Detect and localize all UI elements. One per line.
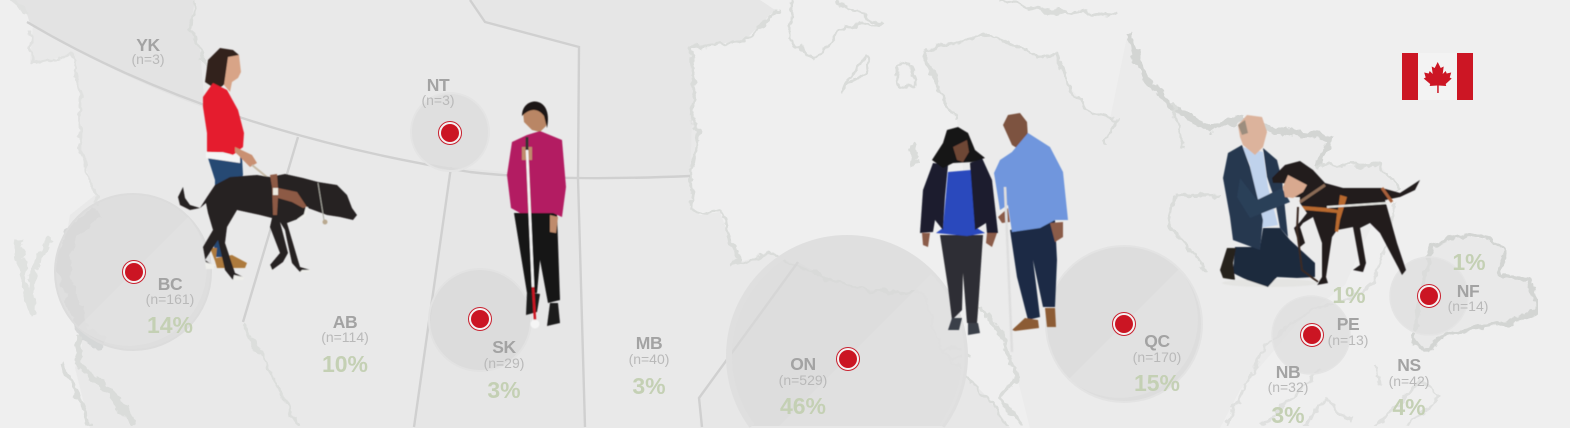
head [1238,115,1267,155]
label: BC: 14% [147,312,193,338]
label: SK [484,337,524,403]
label: NS: NS [1397,355,1421,375]
label: SK: (n=29) [484,355,524,371]
label: SK: SK [492,337,517,357]
label: NT [421,75,455,108]
label: QC: QC [1144,331,1170,351]
label: SK: 3% [487,377,521,403]
arm [1237,178,1290,218]
floor shadow [1222,279,1318,287]
label: PE: 1% [1332,282,1366,308]
marker: BC [122,260,146,284]
white shirt hem [206,152,240,163]
hair [205,48,239,90]
pink shirt [507,131,566,217]
label: MB [629,333,669,399]
icon: Canadian flag [1402,53,1473,100]
marker: ON [836,348,860,370]
shirt [1242,147,1278,228]
label: ON: (n=529) [779,372,827,388]
woman blue top [936,170,985,236]
leash [252,165,273,182]
label: YK [131,35,165,67]
label: PE: PE [1337,314,1359,334]
hands [522,147,558,233]
man head [1003,113,1028,150]
white cane [1005,187,1012,352]
woman hands [922,233,997,247]
woman face [953,140,969,162]
face [224,55,241,92]
trousers [1233,228,1315,287]
label: AB: 10% [322,351,368,377]
black dog [178,174,357,280]
woman trousers [940,235,983,323]
label: BC [146,274,194,338]
man trousers [1010,220,1057,320]
woman jacket [920,158,998,233]
hand [235,147,257,167]
label: NT: (n=3) [421,92,455,108]
harness [1302,195,1347,232]
label: MB: (n=40) [629,351,669,367]
label: ON: 46% [780,393,826,419]
red jacket [203,83,244,155]
circle: NT [411,93,489,171]
marker: NF [1418,284,1440,308]
marker: SK [468,308,492,330]
label: ON [779,354,827,419]
region: Saskatchewan [414,167,585,428]
paws [205,262,311,280]
label: NB: NB [1276,362,1300,382]
label: NS [1389,355,1429,420]
circle: NF [1390,257,1468,335]
provincial borders [27,0,798,427]
label: NF: 1% [1452,249,1486,275]
black dog [1272,161,1420,285]
man shoes [1012,308,1056,331]
label: PE [1328,282,1368,348]
circle: PE [1272,296,1350,374]
label: BC: BC [158,274,183,294]
label: BC: (n=161) [146,291,194,307]
man shirt [994,133,1068,232]
marker: NT [438,122,462,144]
white cane [527,150,533,287]
label: MB: MB [636,333,662,353]
label: NT: NT [427,75,450,95]
woman shoes [948,318,980,335]
label: AB [321,312,369,377]
circle: SK [429,269,531,371]
label: QC: 15% [1134,370,1180,396]
man hands [998,208,1063,242]
black trousers [514,213,560,303]
label: AB: AB [333,312,357,332]
label: NB: 3% [1271,402,1305,428]
landmass: west and north [10,0,1010,428]
label: NS: (n=42) [1389,373,1429,389]
boots [210,248,247,268]
jacket [1223,145,1288,250]
circle: BC [55,194,211,350]
label: NF: (n=14) [1448,298,1488,314]
hand on dog [1283,175,1307,198]
woman hair [932,127,985,168]
circle: QC [1046,246,1202,402]
photo: man kneeling with guide dog [1220,115,1420,287]
photo: woman walking with guide dog [178,48,357,280]
label: QC [1133,331,1181,396]
label: PE: (n=13) [1328,332,1368,348]
label: NB: (n=32) [1268,379,1308,395]
photo: couple walking [920,113,1068,352]
label: NF: NF [1457,281,1480,301]
marker: PE [1300,324,1324,346]
circle: ON [729,238,965,426]
label: NF [1448,249,1488,314]
harness [270,174,307,215]
head [523,107,546,132]
label: AB: (n=114) [321,329,369,345]
label: ON: ON [790,354,816,374]
label: QC: (n=170) [1133,349,1181,365]
jeans [208,157,243,257]
label: NS: 4% [1392,394,1426,420]
label: NB [1268,362,1308,428]
marker: QC [1112,312,1136,336]
region: Nunavut [470,0,775,178]
photo: woman with white cane [507,102,566,328]
shoes [526,292,560,326]
landmass: Newfoundland [1413,235,1538,352]
shoe [1220,248,1236,280]
region: Ontario north [698,262,1010,428]
label: MB: 3% [632,373,666,399]
landmass: Quebec and Labrador [923,32,1400,428]
region: Yukon [10,0,205,108]
label: YK: YK [136,35,161,55]
label: YK: (n=3) [131,51,165,67]
